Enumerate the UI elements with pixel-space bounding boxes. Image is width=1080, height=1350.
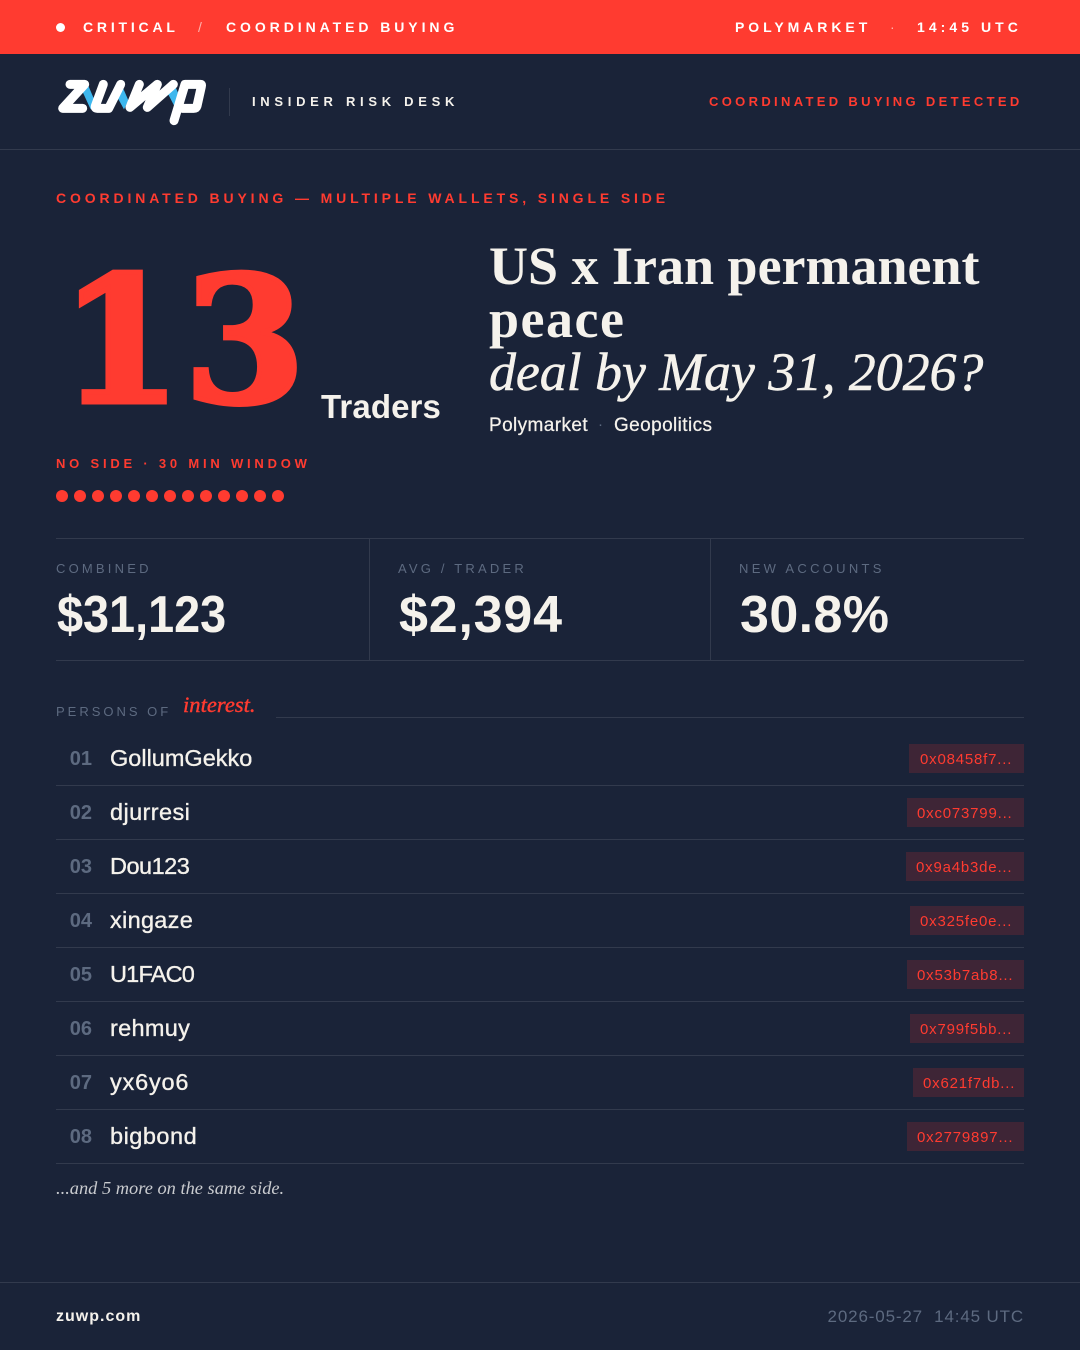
desk label: INSIDER RISK DESK bbox=[252, 94, 459, 109]
trader dots bbox=[56, 490, 284, 502]
header divider bbox=[229, 88, 230, 116]
window label: NO SIDE · 30 MIN WINDOW bbox=[56, 456, 311, 471]
stats row bbox=[56, 538, 1024, 661]
trader 01: GollumGekko bbox=[110, 745, 252, 771]
trader 08 bbox=[56, 1110, 1024, 1164]
header bbox=[0, 54, 1080, 150]
trader 05: 0x53b7ab8... bbox=[917, 967, 1013, 984]
trader 01: 0x08458f7... bbox=[920, 751, 1012, 768]
more note: ...and 5 more on the same side. bbox=[56, 1178, 284, 1198]
alert type: COORDINATED BUYING bbox=[226, 19, 458, 35]
trader 06: rehmuy bbox=[110, 1015, 190, 1041]
trader 02: 0xc073799... bbox=[917, 805, 1012, 822]
stat: new accounts bbox=[739, 561, 889, 644]
trader 03: 03 bbox=[70, 856, 92, 878]
trader 08: bigbond bbox=[110, 1123, 197, 1149]
hero number: 13 bbox=[60, 239, 308, 444]
trader 02 bbox=[56, 786, 1024, 840]
trader 08: 08 bbox=[70, 1126, 92, 1148]
stat: combined: $31,123 bbox=[57, 586, 226, 644]
trader 05: 05 bbox=[70, 964, 92, 986]
trader 08: 0x2779897... bbox=[917, 1129, 1013, 1146]
footer bbox=[0, 1282, 1080, 1350]
venue: POLYMARKET bbox=[735, 19, 871, 35]
trader 07: 07 bbox=[70, 1072, 92, 1094]
eyebrow: COORDINATED BUYING — MULTIPLE WALLETS, SINGLE SIDE bbox=[56, 190, 669, 206]
list heading accent: interest. bbox=[183, 692, 256, 717]
tag separator: · bbox=[598, 416, 603, 433]
trader 04 bbox=[56, 894, 1024, 948]
trader 04: 0x325fe0e... bbox=[920, 913, 1012, 930]
question line 1: US x Iran permanent bbox=[489, 236, 980, 296]
alert label: CRITICAL bbox=[83, 19, 179, 35]
trader 02: 02 bbox=[70, 802, 92, 824]
stat: new accounts: NEW ACCOUNTS bbox=[739, 561, 885, 576]
stat: combined bbox=[56, 561, 226, 644]
trader 05 bbox=[56, 948, 1024, 1002]
time: 14:45 UTC bbox=[917, 19, 1022, 35]
list heading: PERSONS OF bbox=[56, 704, 171, 719]
detected label: COORDINATED BUYING DETECTED bbox=[709, 94, 1023, 109]
trader 01 bbox=[56, 732, 1024, 786]
question line 2: peace bbox=[489, 289, 625, 349]
stat: avg per trader: AVG / TRADER bbox=[398, 561, 527, 576]
tag category: Geopolitics bbox=[614, 415, 712, 436]
trader 03: Dou123 bbox=[110, 853, 189, 879]
top alert bar bbox=[0, 0, 1080, 54]
trader 07 bbox=[56, 1056, 1024, 1110]
trader 07: yx6yo6 bbox=[110, 1069, 189, 1095]
trader 05: U1FAC0 bbox=[110, 961, 194, 987]
trader 03 bbox=[56, 840, 1024, 894]
trader 06: 0x799f5bb... bbox=[920, 1021, 1012, 1038]
stat: combined: COMBINED bbox=[56, 561, 152, 576]
trader 06: 06 bbox=[70, 1018, 92, 1040]
trader 04: xingaze bbox=[110, 907, 193, 933]
footer site: zuwp.com bbox=[56, 1308, 141, 1325]
footer timestamp: 2026-05-27 14:45 UTC bbox=[828, 1307, 1024, 1326]
stat: avg per trader: $2,394 bbox=[399, 586, 563, 644]
trader 01: 01 bbox=[70, 748, 92, 770]
trader 06 bbox=[56, 1002, 1024, 1056]
market tags: Polymarket bbox=[489, 415, 588, 436]
stat: new accounts: 30.8% bbox=[740, 586, 889, 644]
trader 03: 0x9a4b3de... bbox=[916, 859, 1012, 876]
trader 07: 0x621f7db... bbox=[923, 1075, 1015, 1092]
slash separator: / bbox=[198, 19, 202, 35]
traders list bbox=[56, 744, 1024, 1164]
trader 02: djurresi bbox=[110, 799, 190, 825]
icon: zuwp logo bbox=[58, 80, 206, 126]
stat: avg per trader bbox=[398, 561, 563, 644]
dot separator: · bbox=[890, 19, 895, 35]
status dot bbox=[56, 23, 65, 32]
market question bbox=[489, 236, 984, 402]
hero unit: Traders bbox=[321, 388, 441, 425]
question line 3: deal by May 31, 2026? bbox=[489, 342, 983, 402]
trader 04: 04 bbox=[70, 910, 92, 932]
